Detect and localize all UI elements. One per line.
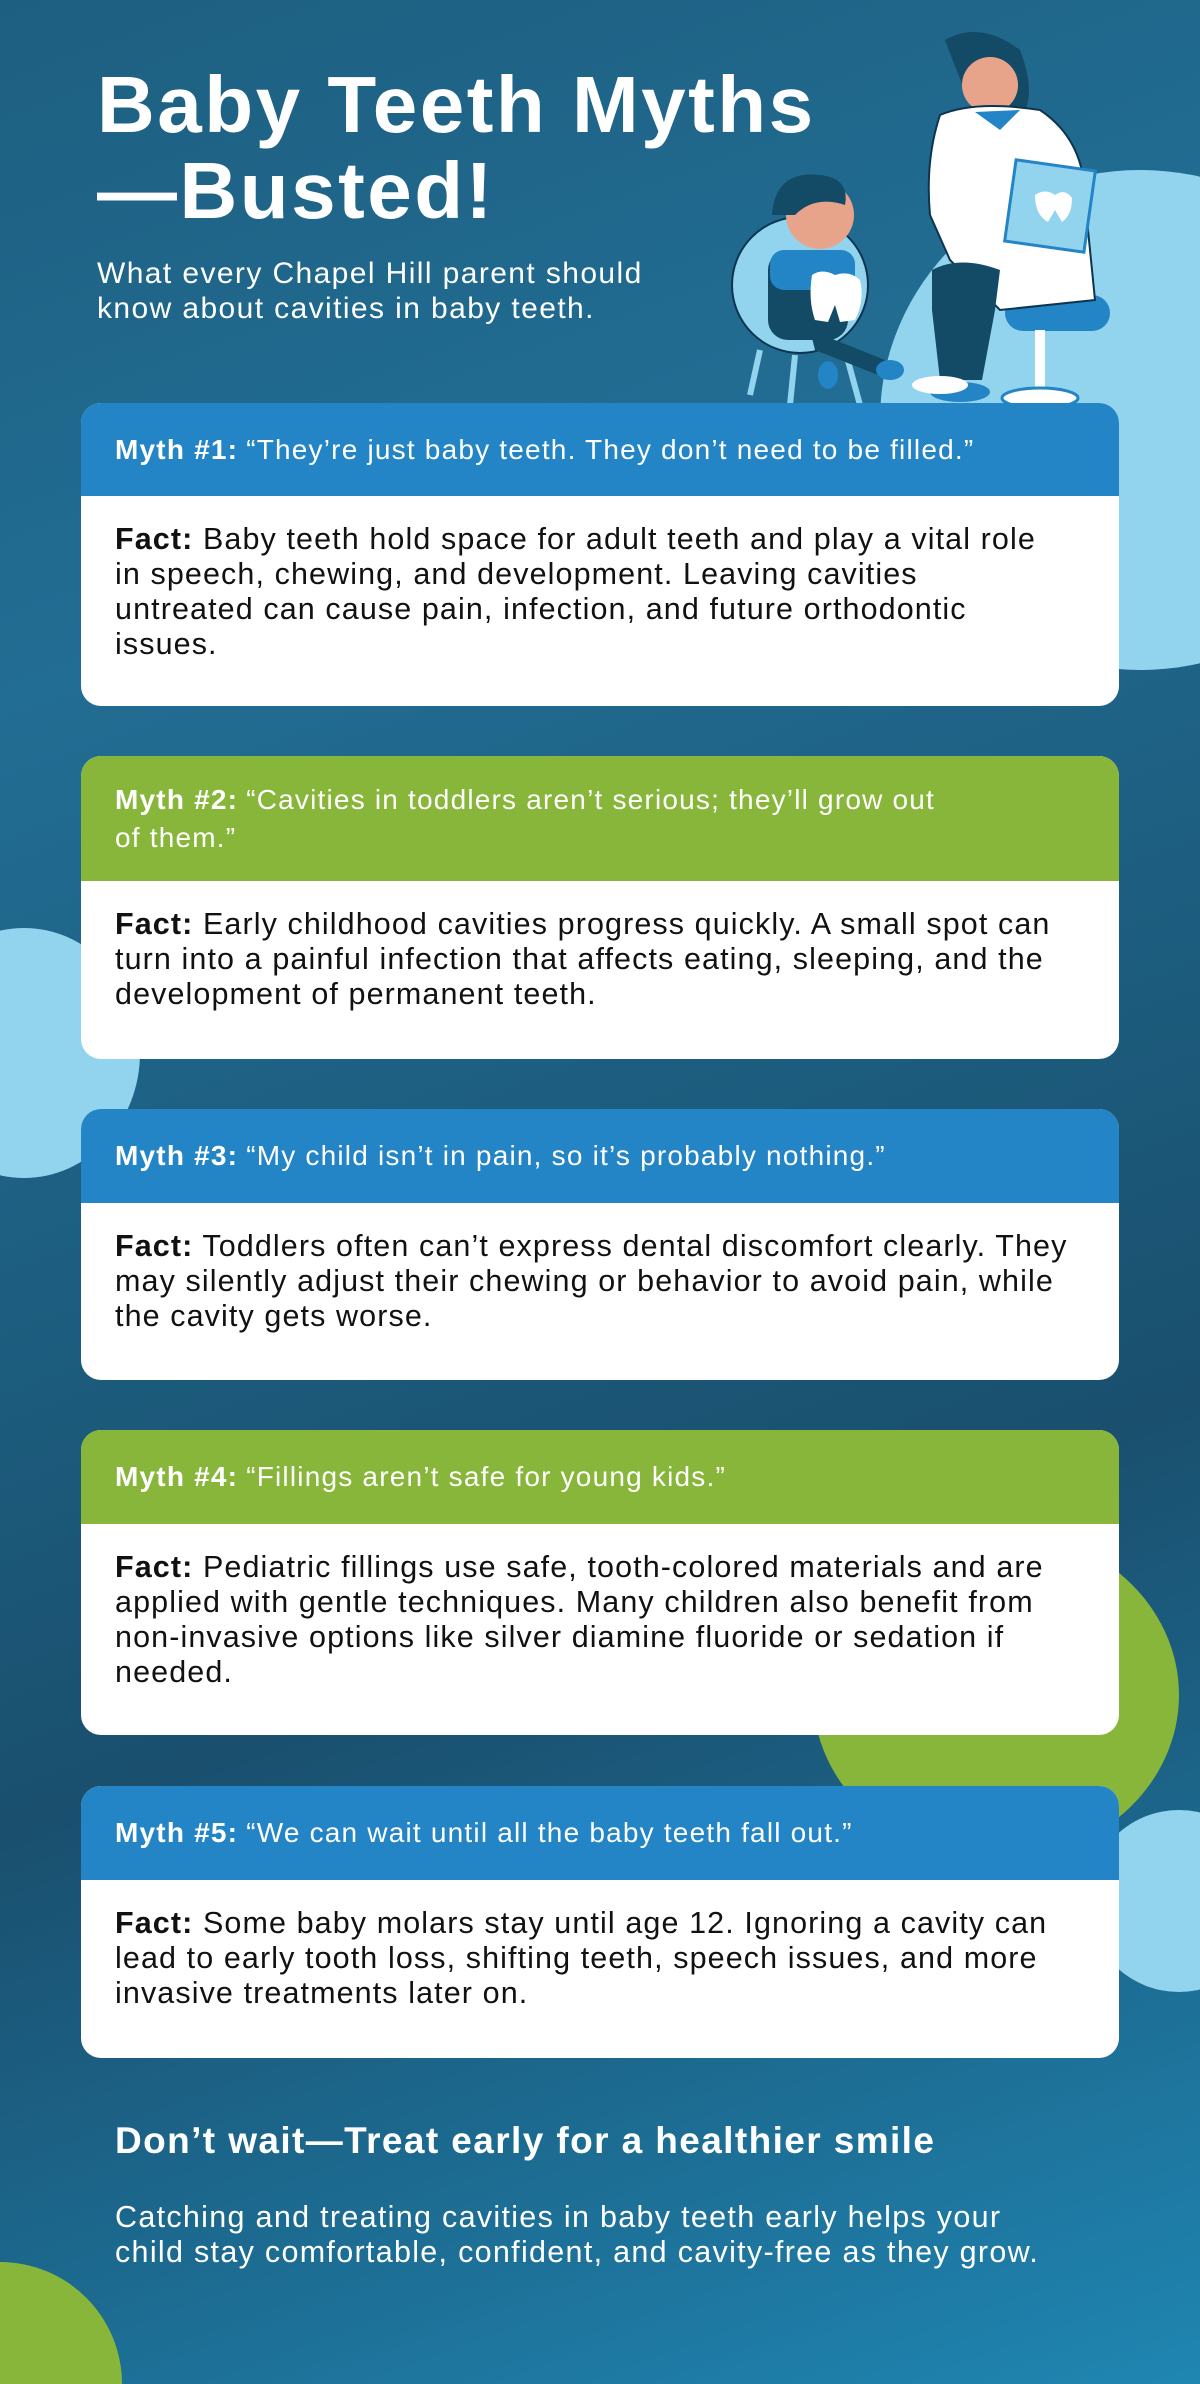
fact 1: issues. [115, 627, 218, 661]
footer text [115, 2200, 1039, 2269]
myth 3 header: Myth #3: “My child isn’t in pain, so it’s probably nothing.” [115, 1140, 886, 1171]
fact 4: Fact: Pediatric fillings use safe, tooth-colored materials and are [115, 1550, 1044, 1584]
fact 3: Fact: Toddlers often can’t express dental discomfort clearly. They [115, 1229, 1067, 1263]
card: myth 5 [81, 1786, 1119, 2058]
fact 1: Fact: Baby teeth hold space for adult teeth and play a vital role [115, 522, 1036, 556]
footer text: child stay comfortable, confident, and cavity-free as they grow. [115, 2235, 1039, 2269]
myth 4 header [81, 1430, 1119, 1524]
myth 4 header: Myth #4: “Fillings aren’t safe for young kids.” [115, 1461, 726, 1492]
title: —Busted! [97, 146, 495, 235]
card: myth 4 [81, 1430, 1119, 1735]
fact 5: lead to early tooth loss, shifting teeth, speech issues, and more [115, 1941, 1038, 1975]
myth 1 header [81, 403, 1119, 496]
fact 3: the cavity gets worse. [115, 1299, 432, 1333]
title: Baby Teeth Myths [97, 60, 816, 149]
fact 5: invasive treatments later on. [115, 1976, 528, 2010]
subtitle: What every Chapel Hill parent should [97, 257, 643, 290]
fact 1: untreated can cause pain, infection, and future orthodontic [115, 592, 967, 626]
fact 5 [115, 1906, 1047, 2010]
fact 1 [115, 522, 1036, 661]
myth 5 header: Myth #5: “We can wait until all the baby teeth fall out.” [115, 1817, 853, 1848]
icon: child [768, 174, 904, 389]
fact 4 [115, 1550, 1044, 1689]
myth 2 header [81, 756, 1119, 881]
fact 5: Fact: Some baby molars stay until age 12. Ignoring a cavity can [115, 1906, 1047, 1940]
subtitle [97, 257, 643, 325]
fact 3: may silently adjust their chewing or behavior to avoid pain, while [115, 1264, 1054, 1298]
card: myth 2 [81, 756, 1119, 1059]
myth 3 header [81, 1109, 1119, 1203]
fact 4: applied with gentle techniques. Many children also benefit from [115, 1585, 1034, 1619]
footer text: Catching and treating cavities in baby teeth early helps your [115, 2200, 1001, 2234]
subtitle: know about cavities in baby teeth. [97, 292, 595, 325]
fact 2: turn into a painful infection that affects eating, sleeping, and the [115, 942, 1044, 976]
title [97, 60, 816, 235]
fact 1: in speech, chewing, and development. Leaving cavities [115, 557, 918, 591]
card: myth 3 [81, 1109, 1119, 1380]
myth 1 header: Myth #1: “They’re just baby teeth. They don’t need to be filled.” [115, 434, 974, 464]
fact 2 [115, 907, 1050, 1011]
illustration: dentist and child [731, 32, 1110, 403]
footer heading: Don’t wait—Treat early for a healthier smile [115, 2120, 935, 2161]
myth 5 header [81, 1786, 1119, 1880]
fact 2: Fact: Early childhood cavities progress quickly. A small spot can [115, 907, 1050, 941]
myth 2 header: Myth #2: “Cavities in toddlers aren’t serious; they’ll grow out [115, 784, 935, 814]
icon: dentist stool [1002, 295, 1110, 408]
fact 3 [115, 1229, 1067, 1333]
icon: dentist [912, 32, 1095, 402]
icon: child chair [732, 217, 868, 405]
myth 2 header: of them.” [115, 822, 236, 852]
fact 2: development of permanent teeth. [115, 977, 597, 1011]
card: myth 1 [81, 403, 1119, 706]
fact 4: non-invasive options like silver diamine fluoride or sedation if [115, 1620, 1004, 1654]
fact 4: needed. [115, 1655, 233, 1689]
